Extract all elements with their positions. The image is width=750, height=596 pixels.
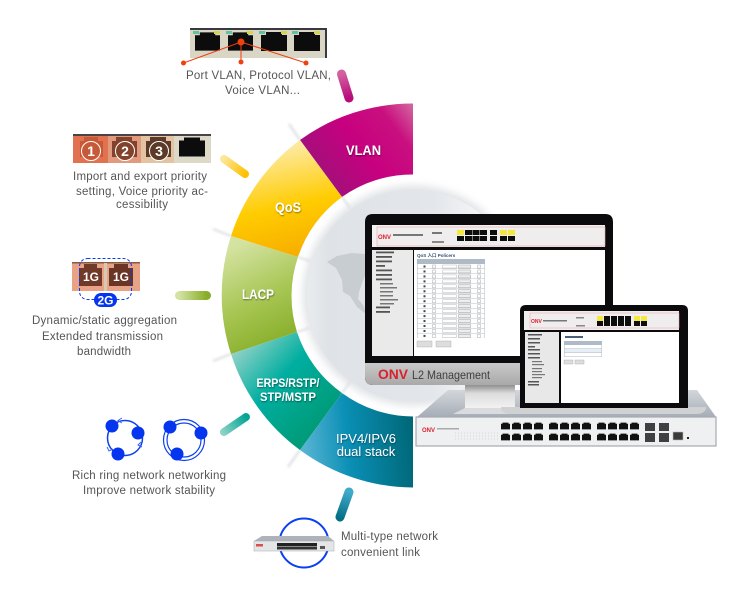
- monitor: [365, 214, 613, 385]
- VLAN feature block: [181, 28, 331, 97]
- network switch: ONV: [422, 428, 435, 434]
- LACP description: [32, 315, 177, 358]
- QoS feature block: [73, 134, 211, 211]
- segment: ERPS/RSTP/STP/MSTP: STP/MSTP: [260, 390, 316, 404]
- monitor sidebar menu: [372, 250, 413, 356]
- monitor brand line: ONV: [378, 366, 409, 382]
- icon: link aggregation 1G + 1G = 2G: 1G: [113, 270, 129, 284]
- LACP description: bandwidth: [77, 346, 131, 358]
- LACP feature block: [32, 258, 177, 358]
- circular segment menu: [222, 103, 413, 488]
- monitor screen header: [372, 225, 605, 247]
- shadow streaks between segments: [213, 82, 415, 510]
- segment: ERPS/RSTP/STP/MSTP: [231, 332, 342, 450]
- segment: VLAN: [300, 103, 413, 197]
- connector pill: VLAN: [342, 74, 349, 98]
- laptop main panel with table: [561, 332, 679, 403]
- world map silhouette: [327, 253, 366, 314]
- monitor brand line: [378, 366, 491, 382]
- monitor main panel with policer table: [414, 250, 605, 356]
- segment: IPV4/IPV6 dual stack: [300, 393, 413, 488]
- QoS description: [73, 171, 208, 211]
- icon: link aggregation 1G + 1G = 2G: 2G: [97, 294, 114, 308]
- LACP description: Extended transmission: [42, 331, 163, 343]
- icon: single ring topology: [106, 418, 144, 460]
- laptop sidebar menu: [525, 332, 559, 403]
- device group: management UI: [365, 214, 716, 446]
- laptop screen header: ONV: [531, 319, 542, 325]
- link description: Multi-type network: [341, 531, 438, 543]
- network switch: [416, 390, 716, 446]
- laptop screen header: [524, 311, 679, 330]
- inner boundary streaks: [297, 197, 350, 393]
- link description: [341, 531, 438, 559]
- segment: QoS: QoS: [275, 199, 301, 215]
- icon: prioritised ports 1 2 3: 2: [121, 143, 129, 159]
- monitor brand line: L2 Management: [412, 368, 491, 382]
- icon: link aggregation 1G + 1G = 2G: [72, 258, 140, 308]
- central disc: [292, 174, 534, 416]
- VLAN description: [186, 70, 331, 97]
- icon: prioritised ports 1 2 3: [73, 134, 211, 163]
- segment: VLAN: VLAN: [346, 142, 381, 158]
- segment: IPV4/IPV6 dual stack: dual stack: [337, 444, 396, 459]
- ring network description: [72, 470, 226, 497]
- LACP description: Dynamic/static aggregation: [32, 315, 177, 327]
- VLAN description: Voice VLAN...: [225, 85, 300, 97]
- connector pill: QoS: [224, 159, 245, 174]
- icon: prioritised ports 1 2 3: 1: [87, 143, 95, 159]
- segment: IPV4/IPV6 dual stack: IPV4/IPV6: [336, 431, 396, 446]
- ring shadow: [303, 186, 523, 406]
- connector pill: LACP: [180, 291, 206, 300]
- icon: double ring topology: [164, 420, 208, 460]
- icon: switch in blue circle: [254, 518, 334, 568]
- monitor stand: [453, 385, 517, 414]
- connector pill: ERPS: [224, 417, 246, 432]
- icon: four ethernet ports with VLAN links: [181, 28, 327, 66]
- multi-type link feature block: [254, 518, 438, 568]
- icon: link aggregation 1G + 1G = 2G: 1G: [83, 270, 99, 284]
- link description: convenient link: [341, 547, 420, 559]
- segment: ERPS/RSTP/STP/MSTP: ERPS/RSTP/: [256, 376, 320, 390]
- segment: LACP: [222, 236, 298, 354]
- QoS description: cessibility: [116, 199, 168, 211]
- ring network feature block: [72, 418, 226, 497]
- icon: prioritised ports 1 2 3: 3: [155, 143, 163, 159]
- VLAN description: Port VLAN, Protocol VLAN,: [186, 70, 331, 82]
- segment: LACP: LACP: [242, 286, 274, 302]
- segment: QoS: [231, 140, 342, 257]
- connector pill: IPV4: [340, 492, 349, 517]
- QoS description: setting, Voice priority ac-: [76, 186, 208, 198]
- monitor main panel with policer table: QoS 入口 Policers: [417, 253, 456, 259]
- white ring: [292, 174, 534, 416]
- grey globe disc: [307, 190, 519, 402]
- ring network description: Improve network stability: [83, 485, 215, 497]
- monitor screen header: ONV: [378, 235, 391, 241]
- QoS description: Import and export priority: [73, 171, 207, 183]
- ring network description: Rich ring network networking: [72, 470, 226, 482]
- laptop: [501, 305, 706, 414]
